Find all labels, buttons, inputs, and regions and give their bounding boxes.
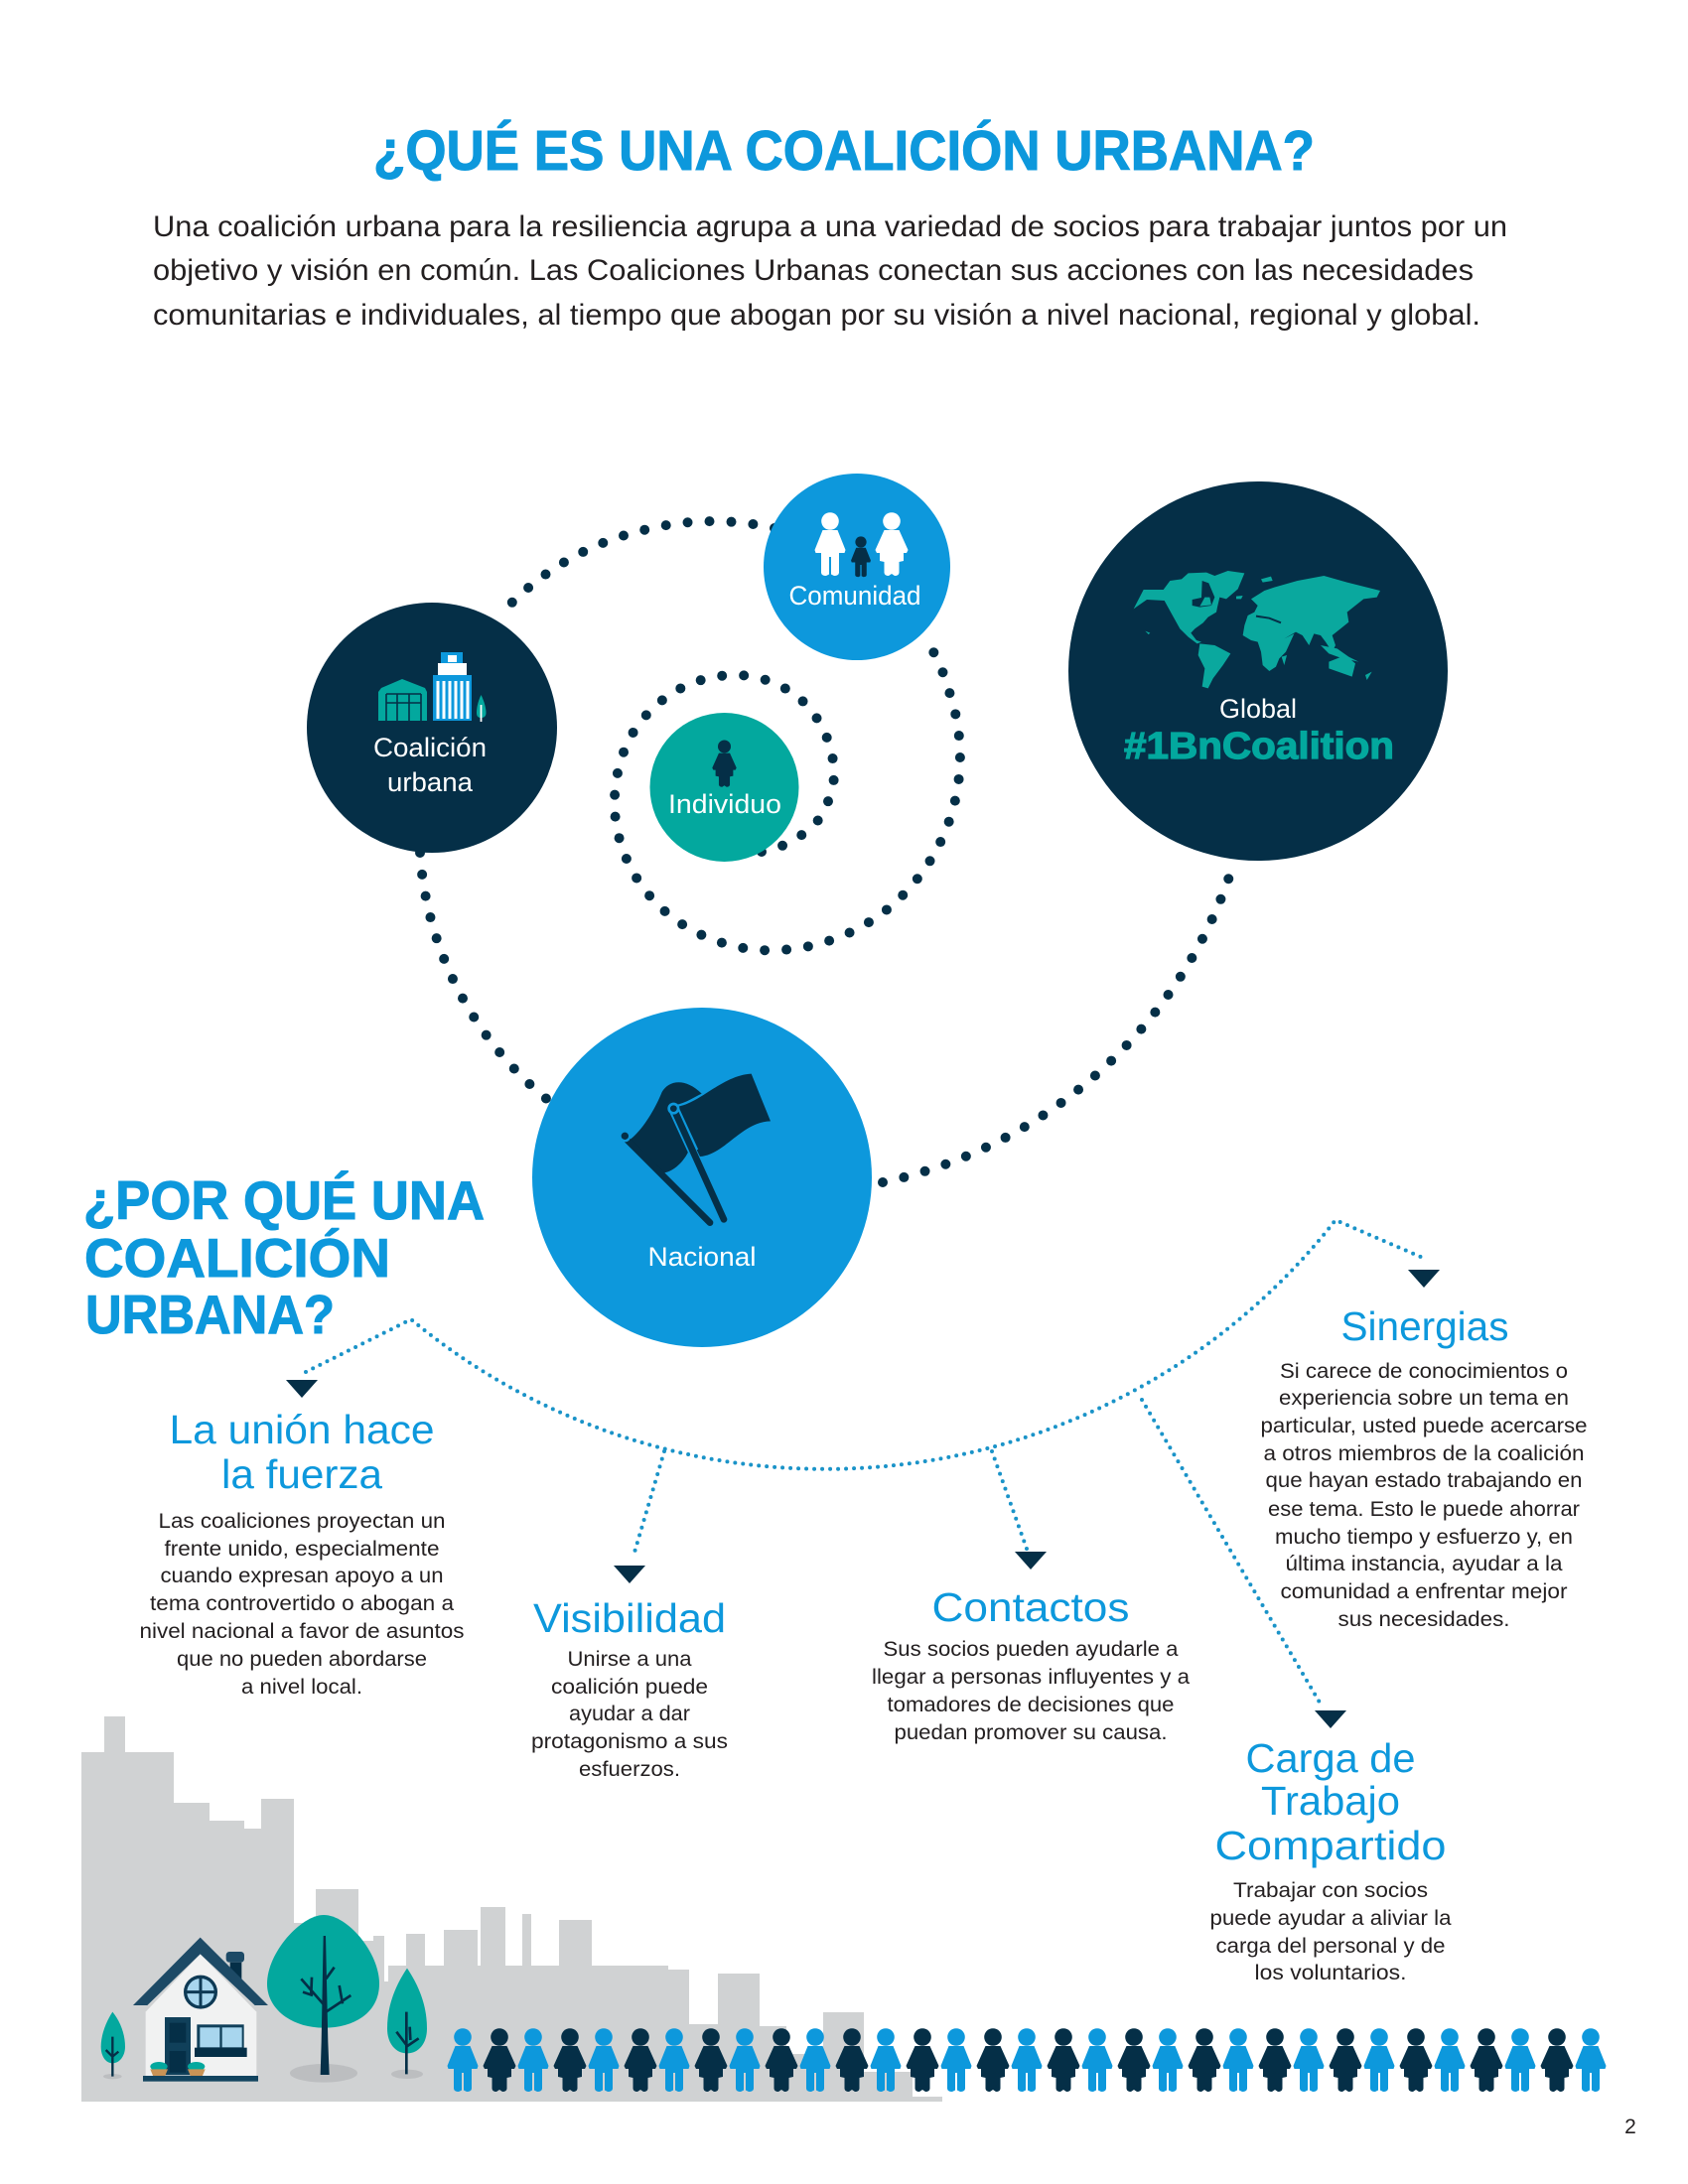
arrow: Visibilidad (614, 1566, 645, 1583)
body text: sus necesidades. (1338, 1607, 1509, 1631)
icon: family (814, 512, 908, 577)
heading (169, 1407, 435, 1497)
circle: Comunidad (764, 474, 950, 660)
city skyline (81, 1716, 942, 2102)
heading: Sinergias (1340, 1303, 1509, 1349)
heading (1215, 1735, 1446, 1868)
body text: frente unido, especialmente (165, 1537, 439, 1561)
hashtag: #1BnCoalition (1124, 726, 1394, 767)
label: Coalición urbana: Coalición (373, 733, 487, 762)
body text: mucho tiempo y esfuerzo y, en (1275, 1525, 1573, 1549)
body text: Sus socios pueden ayudarle a (884, 1637, 1179, 1661)
label: Coalición urbana (373, 733, 487, 797)
panel: Visibilidad (531, 1595, 728, 1781)
label: Nacional: Nacional (647, 1242, 757, 1272)
body text (872, 1637, 1190, 1744)
arrow: Contactos (1015, 1552, 1047, 1570)
heading: por qué una coalición urbana: URBANA? (85, 1284, 335, 1345)
body text: los voluntarios. (1255, 1961, 1406, 1984)
heading: Carga de (1245, 1735, 1416, 1781)
body text: Unirse a una (568, 1647, 692, 1671)
heading: por qué una coalición urbana (83, 1169, 485, 1345)
label: Coalición urbana: urbana (387, 767, 474, 797)
label: Global: Global (1219, 694, 1297, 724)
body text: particular, usted puede acercarse (1261, 1414, 1587, 1437)
body text: comunidad a enfrentar mejor (1281, 1579, 1567, 1603)
icon: city buildings (378, 652, 487, 722)
body text: última instancia, ayudar a la (1285, 1552, 1563, 1575)
body text: Si carece de conocimientos o (1280, 1359, 1568, 1383)
body text (1261, 1359, 1587, 1631)
body text: cuando expresan apoyo a un (161, 1564, 444, 1587)
panel: Carga de Trabajo Compartido (1209, 1735, 1452, 1984)
body text: protagonismo a sus (531, 1729, 728, 1753)
label: Individuo: Individuo (668, 789, 781, 819)
heading: Visibilidad (533, 1595, 726, 1641)
intro paragraph: comunitarias e individuales, al tiempo que abogan por su visión a nivel nacional, regional y global. (153, 299, 1480, 332)
body text: experiencia sobre un tema en (1279, 1386, 1569, 1410)
heading: por qué una coalición urbana: ¿POR QUÉ UNA (83, 1169, 485, 1231)
body text: Trabajar con socios (1233, 1878, 1428, 1902)
icon: house (133, 1938, 268, 2082)
body text: a nivel local. (241, 1675, 362, 1699)
icon: flags (619, 1074, 771, 1223)
page number: 2 (1624, 2116, 1636, 2138)
body text: que no pueden abordarse (177, 1647, 427, 1671)
heading: Trabajo (1261, 1778, 1400, 1824)
circle: Nacional (532, 1008, 872, 1347)
body text (531, 1647, 728, 1781)
panel: La unión hace la fuerza (139, 1407, 465, 1699)
body text: tema controvertido o abogan a (150, 1591, 454, 1615)
body text: coalición puede (551, 1675, 708, 1699)
heading: Contactos (931, 1584, 1130, 1630)
body text (1209, 1878, 1452, 1984)
body text: puede ayudar a aliviar la (1209, 1906, 1452, 1930)
icon: world map (1134, 571, 1380, 688)
circle: Coalición urbana (307, 603, 557, 853)
arrow: La unión hace la fuerza (286, 1380, 318, 1398)
title: ¿QUÉ ES UNA COALICIÓN URBANA? (373, 119, 1315, 183)
body text: tomadores de decisiones que (888, 1693, 1174, 1716)
circle: Global (1068, 481, 1448, 861)
arrow: Sinergias (1408, 1270, 1440, 1288)
body text: que hayan estado trabajando en (1265, 1468, 1583, 1492)
panel: Contactos (872, 1584, 1190, 1744)
body text: llegar a personas influyentes y a (872, 1665, 1190, 1689)
house and trees (101, 1915, 427, 2083)
body text: carga del personal y de (1215, 1934, 1446, 1958)
body text: nivel nacional a favor de asuntos (139, 1619, 465, 1643)
icon: large tree (267, 1915, 379, 2083)
body text (139, 1509, 465, 1699)
body text: ese tema. Esto le puede ahorrar (1268, 1497, 1580, 1521)
circle: Individuo (649, 713, 798, 862)
heading: por qué una coalición urbana: COALICIÓN (84, 1227, 390, 1289)
heading: la fuerza (221, 1451, 382, 1497)
icon: small tree (101, 2012, 125, 2079)
arrow: Carga de Trabajo Compartido (1315, 1710, 1346, 1728)
row of people (447, 2028, 1607, 2092)
dotted benefit connector lines (306, 1220, 1423, 1707)
intro paragraph: Una coalición urbana para la resiliencia agrupa a una variedad de socios para trabajar juntos por un (153, 210, 1507, 243)
icon: person (712, 740, 737, 787)
heading: La unión hace (169, 1407, 435, 1452)
icon: medium tree (387, 1969, 427, 2079)
body text: puedan promover su causa. (894, 1720, 1168, 1744)
heading: Compartido (1215, 1823, 1446, 1868)
body text: esfuerzos. (579, 1757, 680, 1781)
intro paragraph (153, 210, 1507, 332)
body text: Las coaliciones proyectan un (159, 1509, 445, 1533)
intro paragraph: objetivo y visión en común. Las Coaliciones Urbanas conectan sus acciones con las necesidades (153, 254, 1474, 287)
body text: ayudar a dar (569, 1702, 690, 1725)
panel: Sinergias (1261, 1303, 1587, 1631)
label: Comunidad: Comunidad (788, 581, 921, 611)
dotted spiral connecting the circles (420, 521, 1234, 1182)
body text: a otros miembros de la coalición (1263, 1441, 1585, 1465)
